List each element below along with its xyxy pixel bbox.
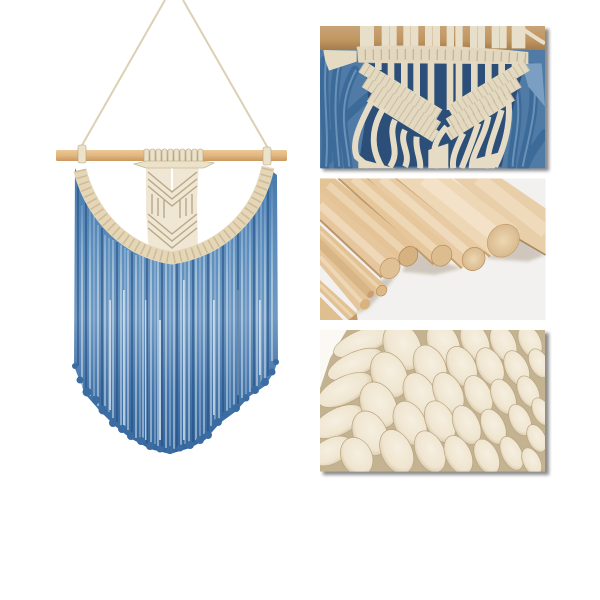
fringe light strands [94, 200, 261, 446]
wood bar [320, 26, 545, 50]
rope C [414, 330, 490, 472]
rope D [444, 330, 518, 472]
fringe knots [72, 359, 279, 454]
cream centre panel [146, 165, 199, 254]
side blue cords [324, 60, 545, 167]
rope A [340, 330, 421, 472]
cream arc band [80, 167, 268, 258]
wooden rod [56, 150, 287, 161]
hanging strings [81, 0, 269, 150]
infographic canvas [56, 0, 552, 478]
rod 3 [367, 178, 485, 268]
rope F [500, 348, 545, 470]
rod 1a [320, 178, 417, 265]
dark centre [358, 63, 525, 167]
vertical cords over bar [364, 26, 522, 48]
panel: wooden dowels close-up [320, 178, 546, 320]
fringe dark strands [78, 180, 268, 448]
frayed left end [323, 50, 357, 71]
lower strands [355, 100, 509, 168]
rope E [474, 330, 542, 472]
rod 2 [340, 178, 439, 262]
small rods [320, 225, 387, 296]
rope B [379, 330, 460, 472]
fringe gaps [82, 185, 272, 449]
panel: cotton rope close-up [320, 330, 552, 478]
left rope strands [320, 330, 385, 466]
hanging strands under band [378, 62, 515, 110]
rope G [521, 398, 545, 472]
rod wrap knots [78, 145, 271, 168]
macrame wall hanging [56, 0, 287, 454]
horizontal knot band [357, 45, 528, 64]
blue fringe [72, 168, 279, 454]
rod 1b [320, 192, 398, 278]
panel: macrame knot close-up [320, 26, 549, 171]
fringe wide gaps [110, 280, 260, 440]
rod 5 [453, 178, 546, 255]
right chevron rows [448, 65, 527, 135]
rod 4 [395, 178, 517, 257]
contact shadows [355, 238, 545, 315]
left chevron rows [362, 67, 439, 137]
